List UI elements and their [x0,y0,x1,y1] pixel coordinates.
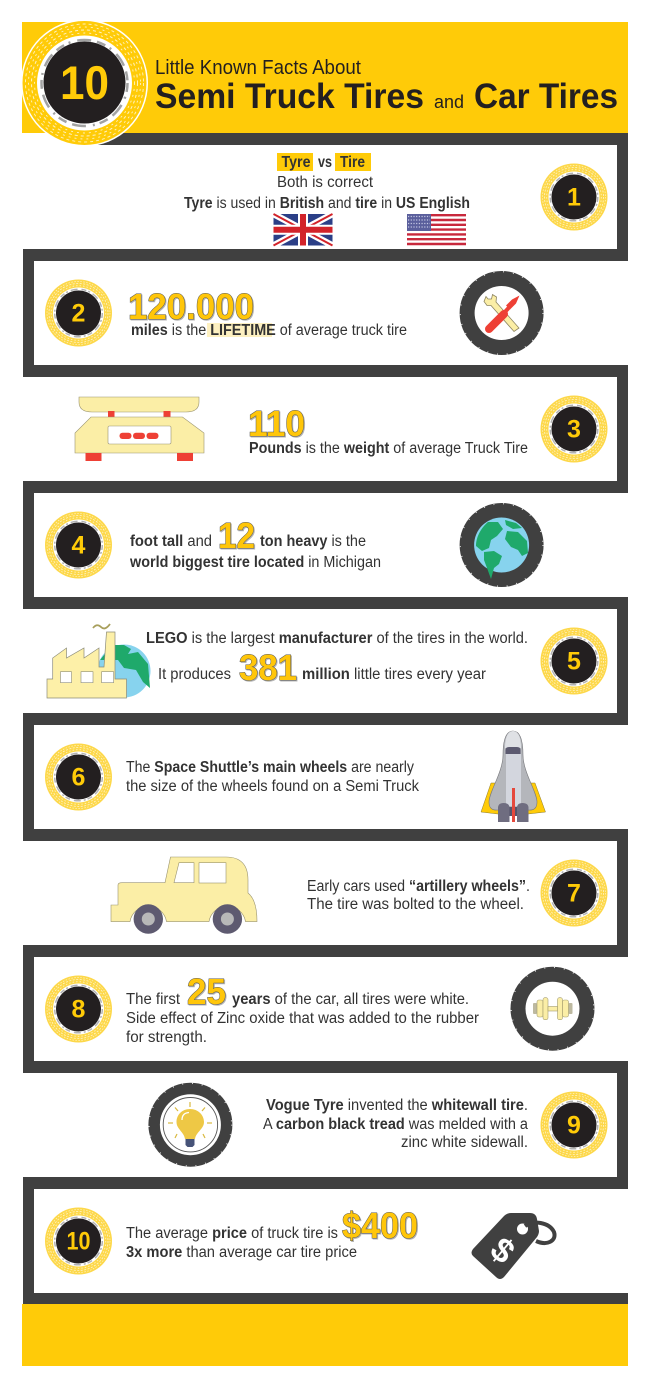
badge 4 [45,512,112,578]
icon: tire with tools [460,271,544,355]
badge 9 [540,1092,608,1158]
footer band [22,1304,628,1366]
badge 1 [540,164,608,230]
title: Car Tires [474,77,618,116]
icon: price tag: $ [483,1230,522,1271]
header badge: 10: 10 [60,56,109,109]
icon: tire with light bulb [148,1083,232,1167]
fact 4: biggest tire: 12 [218,515,255,556]
fact 1: tyre vs tire: vs [318,154,332,171]
fact 4: biggest tire: world biggest tire located in Michigan [129,554,381,571]
badge 8: 8 [72,996,86,1024]
badge 1: 1 [567,184,581,212]
icon: tire with dumbbell [510,967,594,1051]
fact 1: tyre vs tire: Tire [340,154,365,171]
badge 3 [540,396,608,462]
fact 6: space shuttle [126,759,419,795]
badge 10: 10 [66,1228,90,1256]
badge 8 [45,976,112,1042]
fact 8: white tires: 25 [187,971,226,1012]
fact 9: whitewall: zinc white sidewall. [401,1134,528,1151]
fact 8: white tires: The first [126,991,181,1008]
fact 10: price [126,1205,418,1261]
fact 5: lego: LEGO is the largest manufacturer of the tires in the world. [146,630,528,647]
fact 5: lego: 381 [239,647,297,688]
fact 1: tyre vs tire: Tyre is used in British and tire in US English [184,195,470,212]
header badge: 10 [21,20,148,146]
fact 3: weight [248,403,528,457]
header band [22,22,628,133]
badge 6: 6 [72,764,85,792]
fact 7: artillery wheels [307,878,530,913]
fact 10: price: $400 [342,1205,418,1246]
fact 4: biggest tire: ton heavy is the [260,533,366,550]
badge 2: 2 [72,300,85,328]
road: serpentine dark track [23,133,628,1304]
icon: tire with globe [460,503,544,587]
badge 2 [45,280,112,346]
title: Little Known Facts About [155,57,361,79]
fact 2: lifetime [128,286,407,339]
fact 7: artillery wheels: Early cars used “artillery wheels”. [307,878,530,895]
fact 3: weight: Pounds is the weight of average Truck Tire [249,440,528,457]
fact 1: tyre vs tire: Tyre [282,154,311,171]
badge 10 [45,1208,112,1274]
fact 8: white tires [126,971,479,1046]
fact 4: biggest tire [129,515,381,571]
badge 5: 5 [567,648,581,676]
fact 7: artillery wheels: The tire was bolted to the wheel. [307,896,524,913]
fact 5: lego: million little tires every year [302,666,486,683]
fact 1: tyre vs tire: Both is correct [277,174,374,191]
fact 8: white tires: for strength. [126,1029,207,1046]
fact 9: whitewall: A carbon black tread was melded with a [263,1116,528,1133]
fact 8: white tires: Side effect of Zinc oxide that was added to the rubber [126,1010,479,1027]
icon: space shuttle [481,731,546,822]
fact 6: space shuttle: The Space Shuttle’s main wheels are nearly [126,759,414,776]
fact 4: biggest tire: foot tall and [130,533,212,550]
badge 9: 9 [567,1112,581,1140]
icon: US flag [407,214,466,246]
badge 6 [45,744,112,810]
badge 4: 4 [72,532,86,560]
title: and [434,92,464,112]
fact 9: whitewall: Vogue Tyre invented the whitewall tire. [266,1097,528,1114]
fact 3: weight: 110 [248,403,305,444]
icon: factory and globe [47,624,150,698]
badge 7: 7 [567,880,581,908]
icon: UK flag [274,214,332,246]
badge 5 [540,628,608,694]
fact 1: tyre vs tire [184,153,470,212]
icon: old car [111,857,257,934]
badge 7 [540,860,608,926]
icon: price tag [472,1213,555,1279]
fact 10: price: 3x more than average car tire price [126,1244,357,1261]
badge 3: 3 [567,416,581,444]
fact 5: lego [146,630,528,688]
fact 8: white tires: years of the car, all tires were white. [232,991,469,1008]
icon: scale [75,397,204,461]
fact 2: lifetime: 120.000 [128,286,254,327]
fact 10: price: The average price of truck tire is [126,1225,338,1242]
fact 6: space shuttle: the size of the wheels found on a Semi Truck [126,778,419,795]
title: Semi Truck Tires [155,77,424,116]
title [155,57,618,116]
fact 5: lego: It produces [158,666,231,683]
fact 2: lifetime: miles is the LIFETIME of average truck tire [131,322,407,339]
fact 9: whitewall [263,1097,528,1151]
